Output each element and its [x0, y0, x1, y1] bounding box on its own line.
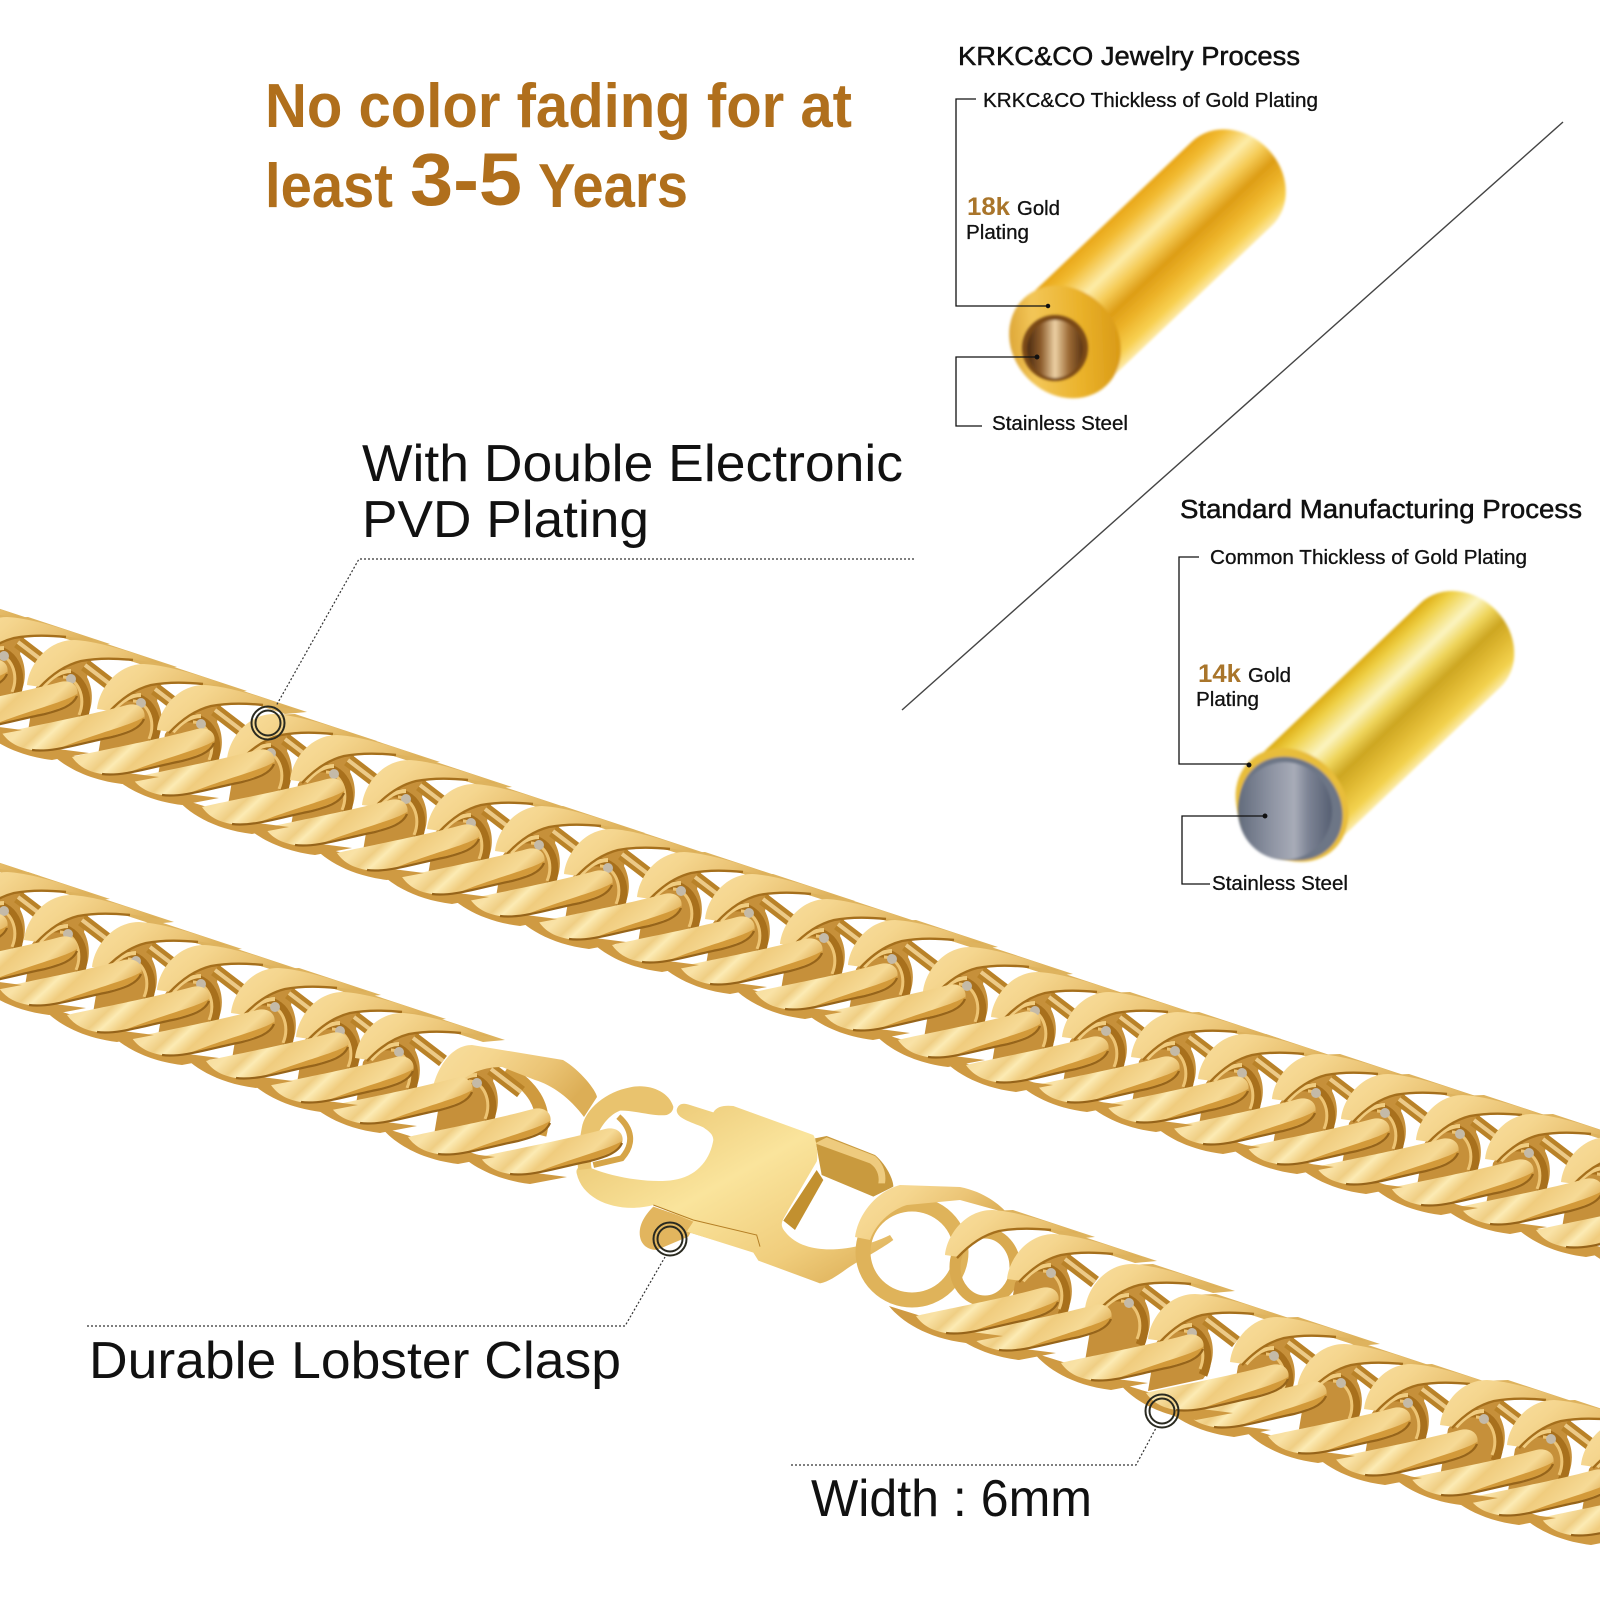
label: 14k gold plating: Plating: [1196, 689, 1259, 711]
callout: width: [791, 1394, 1178, 1528]
link bars: [0, 913, 623, 1184]
callout bracket: plating: [956, 99, 1050, 308]
clasp: [576, 1086, 893, 1283]
jump ring: [578, 1086, 673, 1170]
leader line: [87, 1257, 665, 1326]
callout text: [362, 435, 903, 549]
title: No color fading for at: [265, 72, 852, 141]
chain: upper strand: [0, 595, 1600, 1277]
marker ring: [1146, 1394, 1178, 1428]
panel: KRKC process: [956, 43, 1318, 435]
callout bracket: steel: [956, 355, 1039, 426]
callout text: Durable Lobster Clasp: [89, 1332, 621, 1390]
big connecting ring: [863, 1204, 961, 1300]
second connecting ring: [955, 1233, 1015, 1301]
slot: [687, 1228, 758, 1253]
chain: lower left strand: [0, 849, 623, 1184]
icon: stainless steel core: [1022, 315, 1088, 381]
link bars: [0, 659, 1600, 1277]
icon: gold plated cylinder with thick plating: [986, 106, 1309, 421]
marker ring: [252, 706, 284, 740]
callout text: Width : 6mm: [811, 1470, 1092, 1528]
link crescents: [0, 595, 1600, 1185]
link backs: [1007, 1255, 1600, 1517]
callout text: PVD Plating: [362, 491, 649, 549]
label: stainless steel: Stainless Steel: [992, 413, 1128, 435]
thumb latch: [640, 1207, 697, 1250]
label: stainless steel: Stainless Steel: [1212, 873, 1348, 895]
link crescents: [945, 1210, 1600, 1468]
callout: lobster clasp: [87, 1222, 686, 1390]
label: 14k gold plating: 14k: [1198, 660, 1241, 688]
jump ring back: [593, 1117, 630, 1165]
label: 18k gold plating: Gold: [1017, 198, 1060, 220]
title: Years: [538, 152, 688, 221]
marker ring: [654, 1222, 686, 1256]
label: 14k gold plating: [1196, 660, 1291, 711]
rear bracket: [815, 1136, 893, 1197]
callout bracket: plating: [1179, 557, 1251, 767]
leader line: [276, 559, 914, 706]
diagonal divider: [902, 122, 1563, 710]
icon: gold plated cylinder with thin plating: [1212, 567, 1539, 885]
chain: lower right strand: [855, 1185, 1600, 1567]
title: least: [265, 152, 393, 221]
last crescent extension: [433, 1045, 597, 1117]
label: 18k gold plating: Plating: [966, 222, 1029, 244]
leader line: [791, 1428, 1156, 1465]
crease: [653, 1205, 760, 1247]
title: 3-5: [410, 138, 522, 221]
inner bar: [783, 1170, 823, 1230]
label: 18k gold plating: [966, 193, 1060, 244]
lobster body: [576, 1104, 893, 1283]
callout text: With Double Electronic: [362, 435, 903, 493]
icon: steel core face: [1238, 762, 1332, 860]
link bars: [889, 1287, 1600, 1567]
callout bracket: steel: [1182, 814, 1267, 884]
link backs: [0, 893, 521, 1141]
panel: standard process: [1179, 496, 1582, 895]
link backs: [0, 638, 1600, 1234]
title: [265, 72, 852, 221]
end link inner arc: [506, 1070, 542, 1135]
top crescent over big ring: [855, 1185, 1007, 1240]
heading: standard process: Standard Manufacturing Process: [1180, 496, 1582, 524]
label: 14k gold plating: Gold: [1248, 665, 1291, 687]
heading: KRKC process: KRKC&CO Jewelry Process: [958, 43, 1300, 71]
bracket top rim: [815, 1137, 885, 1183]
label: common thickness: Common Thickless of Gold Plating: [1210, 547, 1527, 569]
label: thickness of gold plating: KRKC&CO Thickless of Gold Plating: [983, 90, 1318, 112]
label: 18k gold plating: 18k: [967, 193, 1010, 221]
callout: PVD plating: [252, 435, 914, 740]
link crescents: [0, 849, 505, 1061]
